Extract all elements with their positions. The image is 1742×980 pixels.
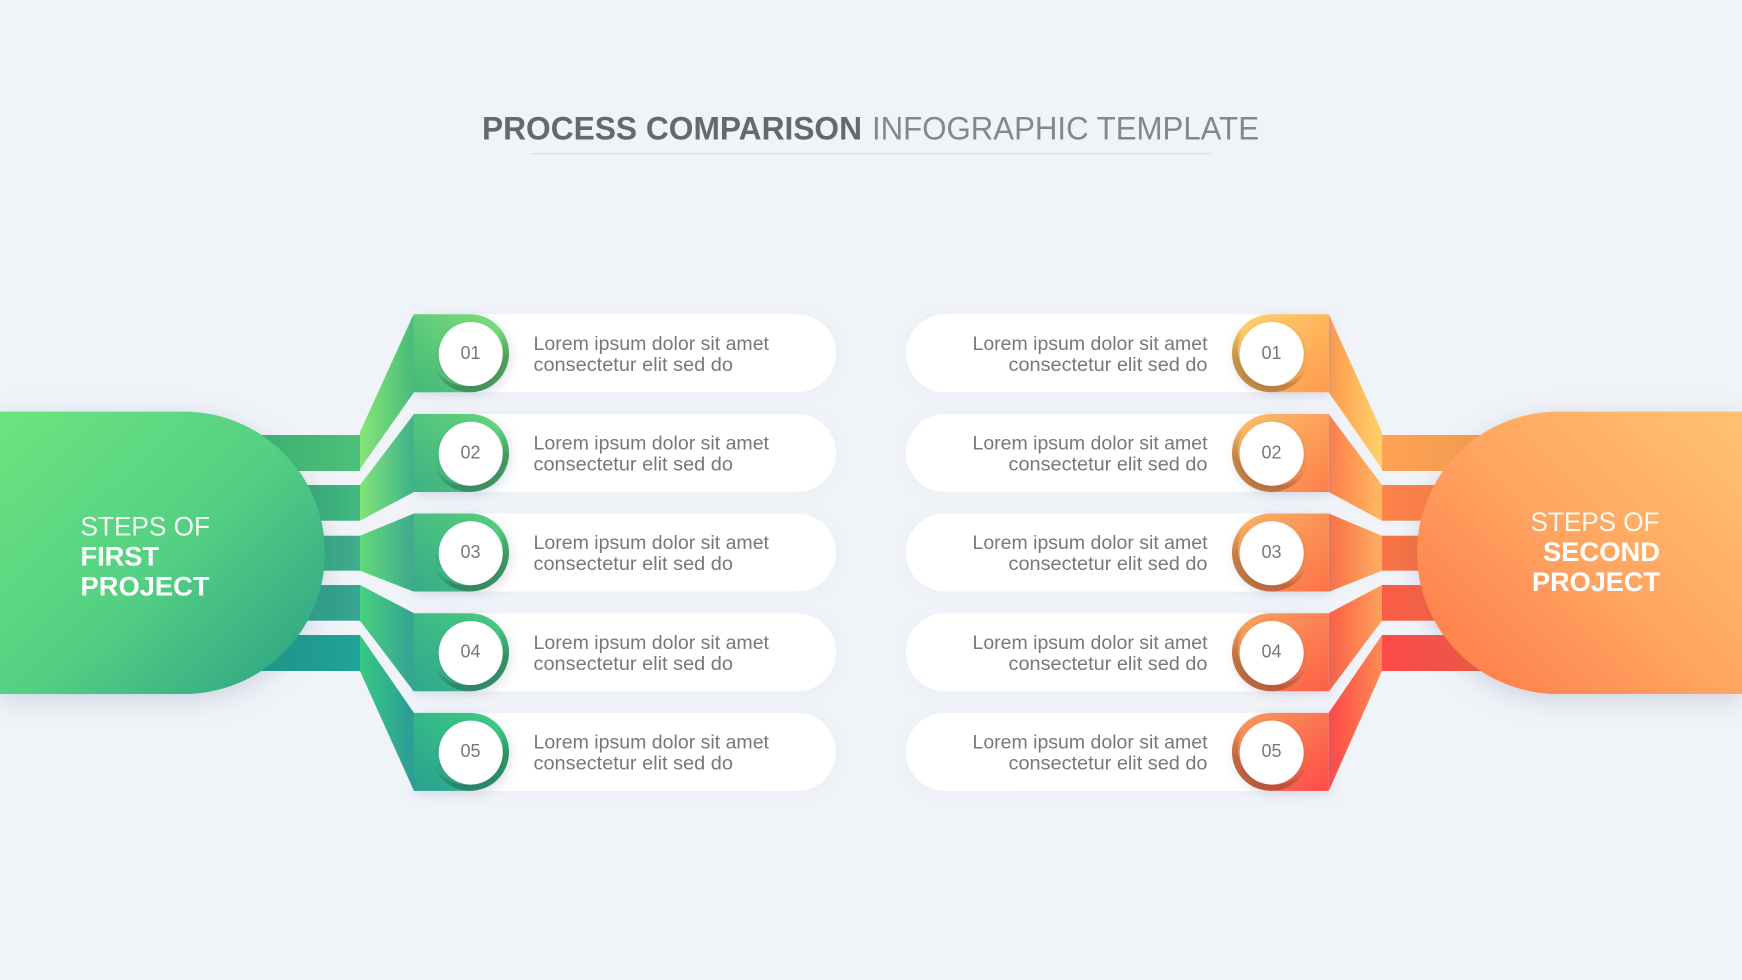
step 03 right: Lorem ipsum dolor sit amet [972,533,1208,554]
project label: first [80,512,210,602]
step 05 left: Lorem ipsum dolor sit amet [534,733,770,754]
step 04 left [414,613,770,691]
step 05 left: 05 [460,741,481,761]
step text pills left [413,314,836,791]
project label: first: STEPS OF [80,512,210,542]
angled connectors left [360,314,414,791]
step 05 right [972,713,1329,791]
step 02 left: Lorem ipsum dolor sit amet [534,434,770,455]
step 05 right: Lorem ipsum dolor sit amet [972,733,1208,754]
project blob: first [0,412,325,694]
step 01 right [972,314,1329,392]
step 02 left: consectetur elit sed do [534,455,733,476]
step 03 right: consectetur elit sed do [1008,554,1208,575]
step 02 left: 02 [460,442,481,462]
step text pills right [906,314,1329,791]
project label: second [1530,507,1661,597]
panel: second project steps [906,314,1742,791]
step 03 left: 03 [460,542,481,562]
connector bars left [250,435,360,671]
step 05 right: consectetur elit sed do [1008,754,1208,775]
step 04 right [972,613,1329,691]
step 05 left: consectetur elit sed do [534,754,733,775]
step 04 right: Lorem ipsum dolor sit amet [972,633,1208,654]
step 03 left [414,514,770,592]
step 02 right [972,414,1329,492]
step 01 right: Lorem ipsum dolor sit amet [972,334,1208,355]
step 03 right [972,514,1329,592]
step 02 left [414,414,770,492]
step 03 left: Lorem ipsum dolor sit amet [534,533,770,554]
title: INFOGRAPHIC TEMPLATE [872,110,1259,146]
step 04 left: 04 [460,642,481,662]
connector bars right [1382,435,1492,671]
step 01 left: Lorem ipsum dolor sit amet [534,334,770,355]
step 04 right: 04 [1261,642,1282,662]
step 01 left: 01 [460,343,481,363]
step 02 right: consectetur elit sed do [1008,455,1208,476]
step 03 left: consectetur elit sed do [534,554,733,575]
step 01 right: 01 [1261,343,1282,363]
project label: second: STEPS OF [1530,507,1660,537]
step 02 right: Lorem ipsum dolor sit amet [972,434,1208,455]
step 05 right: 05 [1261,741,1282,761]
step 04 left: consectetur elit sed do [534,654,733,675]
project label: second: SECOND [1543,537,1660,567]
title [482,110,1259,154]
project label: first: PROJECT [80,572,210,602]
title: PROCESS COMPARISON [482,110,862,146]
step 05 left [414,713,770,791]
step 02 right: 02 [1261,442,1282,462]
step 04 left: Lorem ipsum dolor sit amet [534,633,770,654]
project label: first: FIRST [80,542,160,572]
project blob: second [1417,412,1742,694]
step 01 right: consectetur elit sed do [1008,355,1208,376]
step 03 right: 03 [1261,542,1282,562]
panel: first project steps [0,314,836,791]
project label: second: PROJECT [1532,567,1661,597]
step 01 left [414,314,770,392]
step 04 right: consectetur elit sed do [1008,654,1208,675]
angled connectors right [1329,314,1382,791]
step 01 left: consectetur elit sed do [534,355,733,376]
